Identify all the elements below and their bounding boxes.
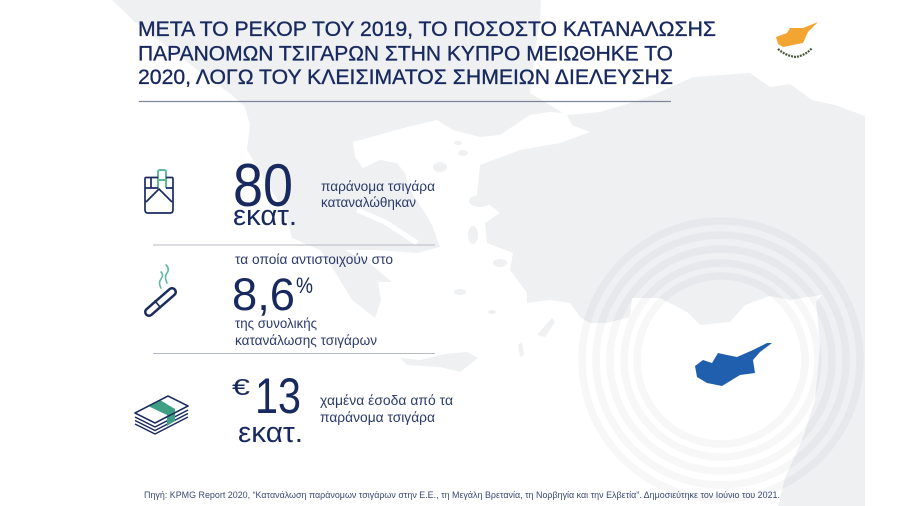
stat: 8,6 percent: % bbox=[296, 273, 313, 298]
stat: 13 million euro: € bbox=[232, 374, 250, 400]
stat: 13 million euro bbox=[232, 368, 303, 449]
text: of total consumption: της συνολικής bbox=[235, 316, 317, 331]
map highlight: Cyprus bbox=[695, 343, 772, 386]
icon: lit cigarette bbox=[149, 265, 172, 312]
text: illegal cigarettes consumed: καταναλώθηκαν bbox=[321, 195, 416, 210]
text: lost revenue: χαμένα έσοδα από τα bbox=[320, 393, 453, 408]
stat: 13 million euro: 13 bbox=[255, 368, 301, 424]
concentric rings bbox=[582, 221, 860, 499]
text: illegal cigarettes consumed bbox=[321, 179, 435, 210]
text: which correspond to: τα οποία αντιστοιχούν στο bbox=[235, 252, 393, 267]
source note: Πηγή: KPMG Report 2020, “Κατανάλωση παράνομων τσιγάρων στην Ε.Ε., τη Μεγάλη Βρετανία, τη Νορβηγία και την Ελβετία”. Δημοσιεύτηκε τον Ιούνιο του 2021. bbox=[144, 490, 780, 501]
text: lost revenue bbox=[320, 393, 453, 425]
stat: 80 million: εκατ. bbox=[233, 200, 297, 232]
icon: money stack bbox=[135, 396, 188, 434]
stat: 80 million: 80 bbox=[233, 152, 293, 219]
title: 2020, ΛΟΓΩ ΤΟΥ ΚΛΕΙΣΙΜΑΤΟΣ ΣΗΜΕΙΩΝ ΔΙΕΛΕΥΣΗΣ bbox=[138, 65, 673, 89]
stat: 13 million euro: εκατ. bbox=[238, 417, 303, 449]
title: ΜΕΤΑ ΤΟ ΡΕΚΟΡ ΤΟΥ 2019, ΤΟ ΠΟΣΟΣΤΟ ΚΑΤΑΝΑΛΩΣΗΣ bbox=[138, 17, 716, 41]
text: of total consumption: κατανάλωσης τσιγάρων bbox=[235, 333, 377, 348]
text: illegal cigarettes consumed: παράνομα τσιγάρα bbox=[321, 179, 435, 194]
icon: cigarette pack bbox=[145, 170, 173, 213]
title bbox=[138, 17, 716, 89]
text: of total consumption bbox=[235, 316, 377, 348]
title: ΠΑΡΑΝΟΜΩΝ ΤΣΙΓΑΡΩΝ ΣΤΗΝ ΚΥΠΡΟ ΜΕΙΩΘΗΚΕ ΤΟ bbox=[138, 42, 673, 66]
text: lost revenue: παράνομα τσιγάρα bbox=[320, 410, 435, 425]
stat: 8,6 percent: 8,6 bbox=[232, 269, 295, 320]
icon: Cyprus flag bbox=[776, 22, 818, 57]
